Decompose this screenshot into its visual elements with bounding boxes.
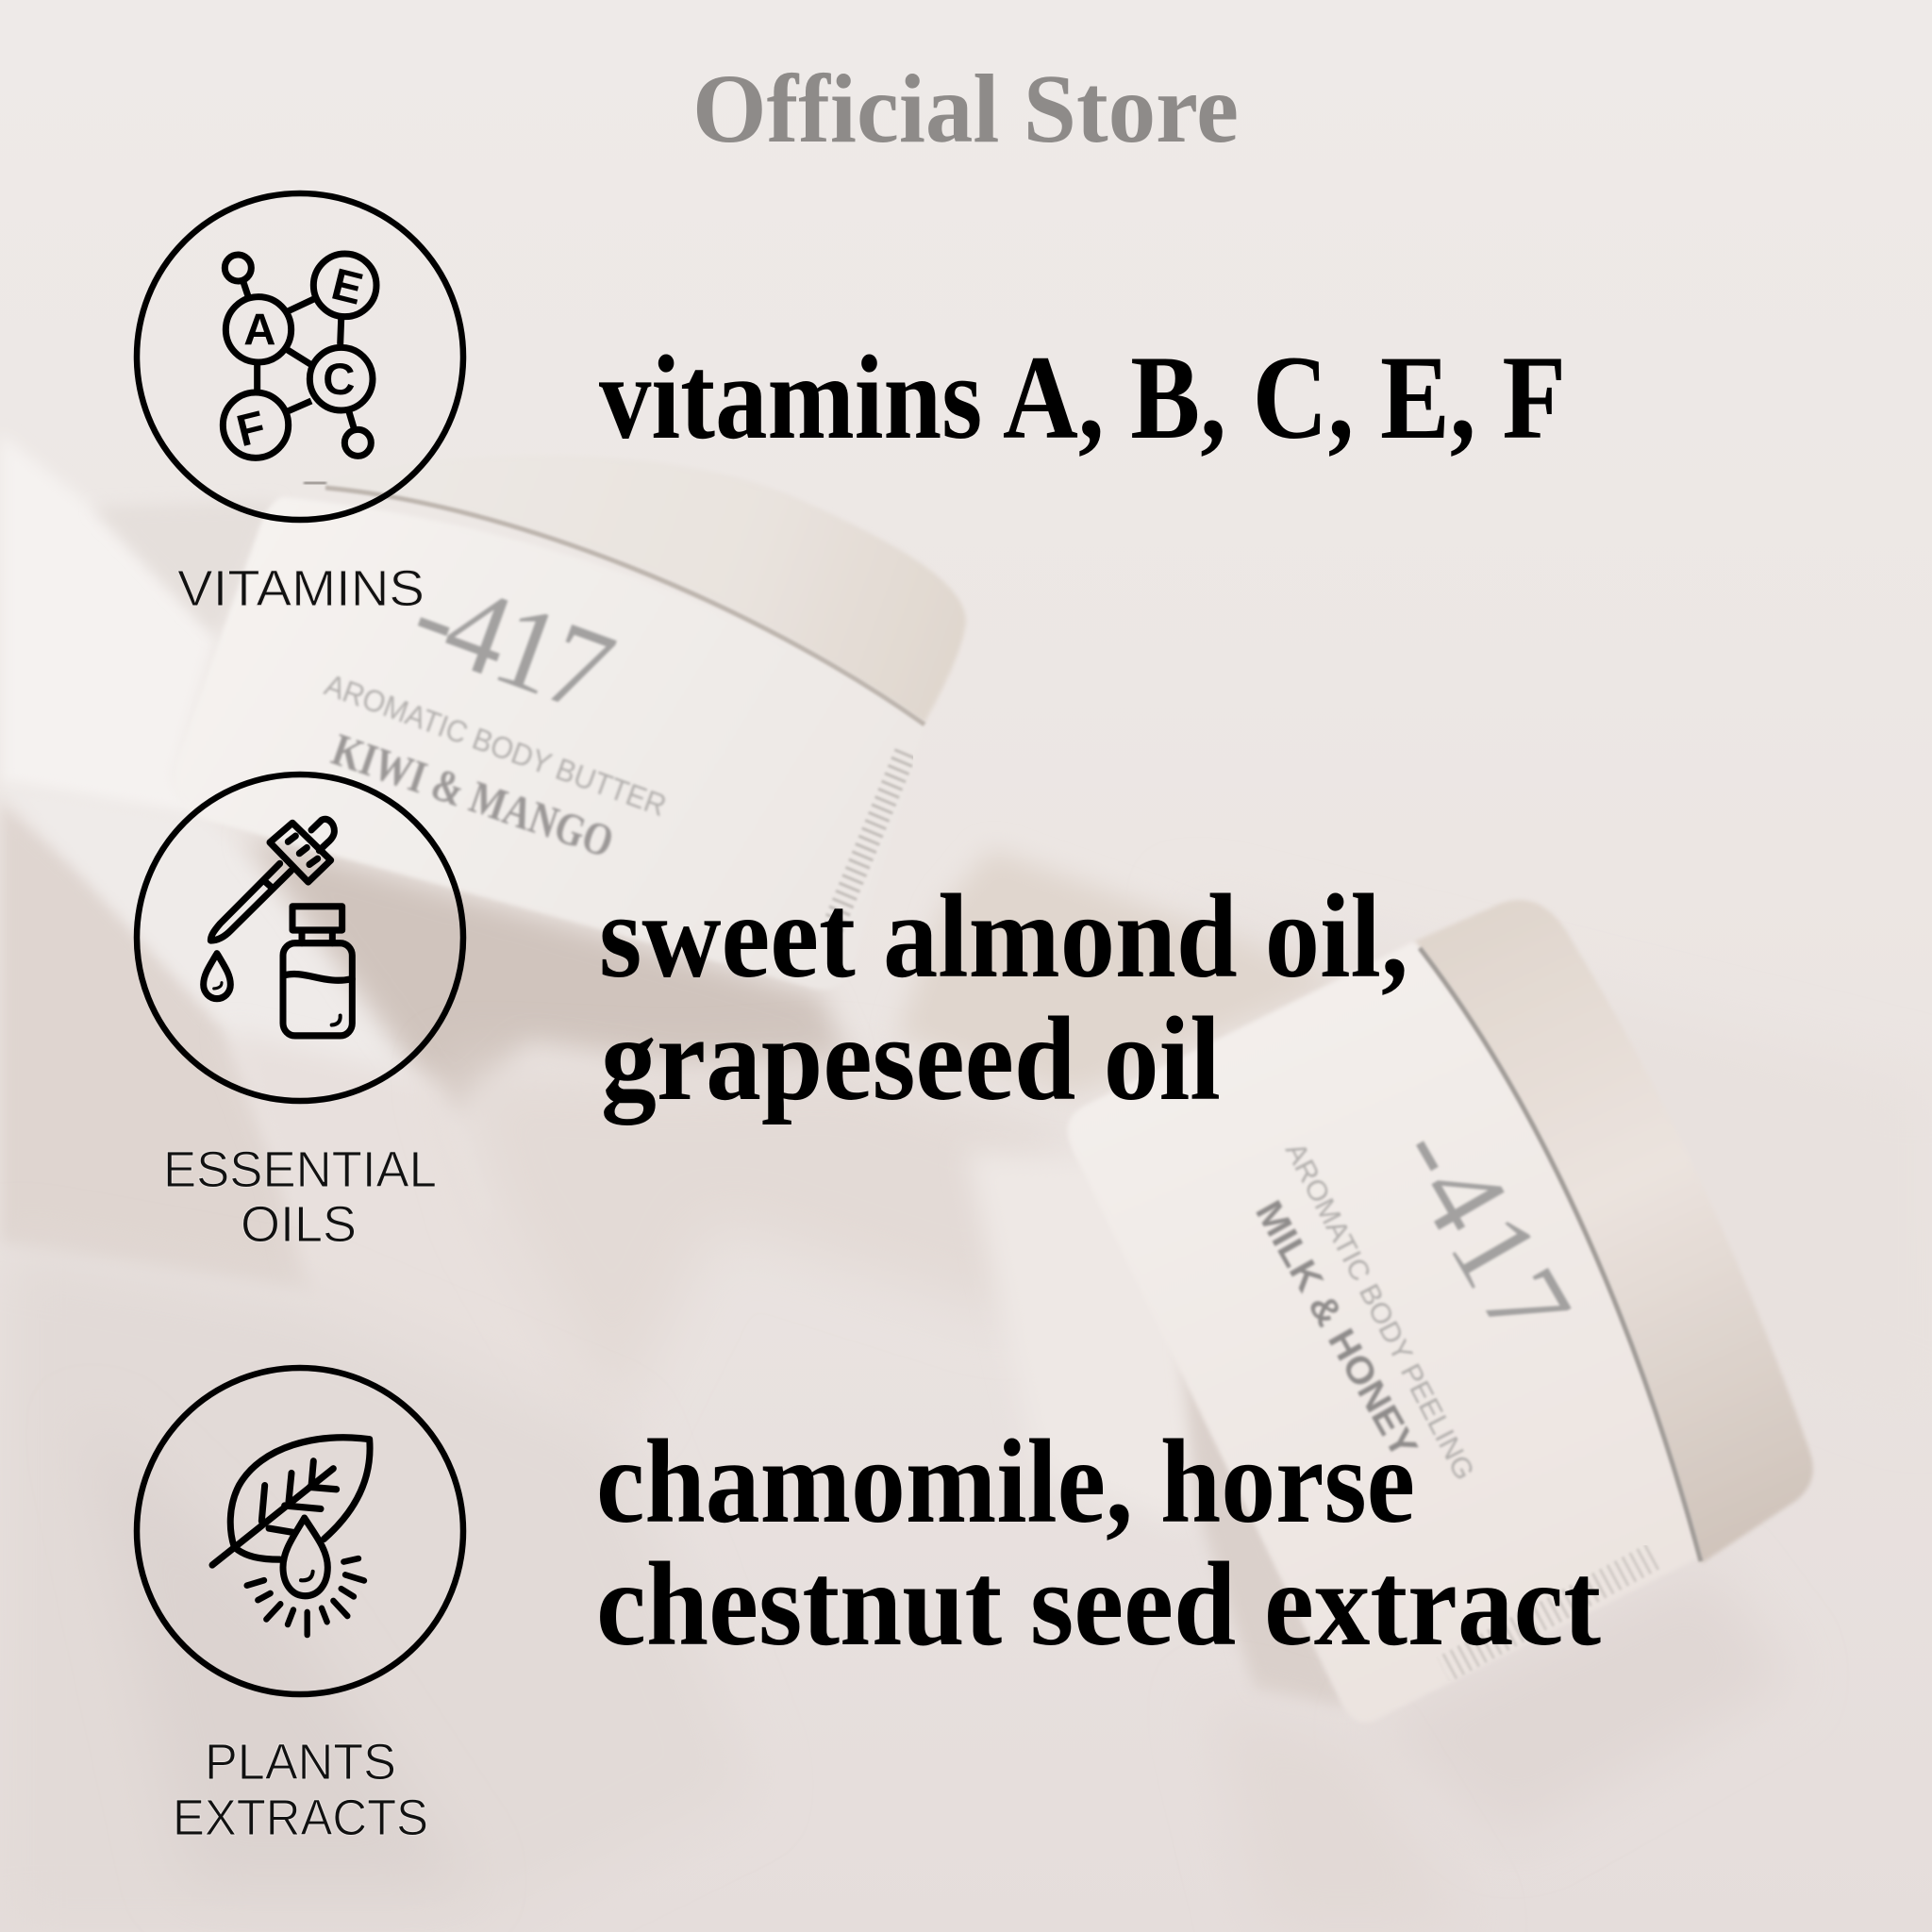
panel: plants extracts xyxy=(137,1368,463,1846)
jar 1 brand -417: -417 xyxy=(396,549,629,740)
icon: dropper and bottle xyxy=(137,774,463,1101)
jar 1 product type: AROMATIC BODY BUTTER xyxy=(321,668,671,823)
text: plants list: chestnut seed extract xyxy=(596,1539,1601,1671)
label: essential: ESSENTIAL xyxy=(163,1141,437,1198)
text: plants list xyxy=(596,1416,1601,1671)
jar 1 scent name: KIWI & MANGO xyxy=(325,723,620,868)
fabric folds xyxy=(0,433,1932,1932)
jar 1 hatch marks xyxy=(832,753,906,929)
icon: vitamins molecule: F xyxy=(232,402,271,457)
jar 2 product type: AROMATIC BODY PEELING xyxy=(1279,1138,1480,1485)
jar 2 scent name: MILK & HONEY xyxy=(1247,1194,1425,1465)
text: plants list: chamomile, horse xyxy=(596,1416,1415,1548)
text: oils list: sweet almond oil, xyxy=(599,871,1408,1003)
panel: vitamins xyxy=(137,193,463,617)
text: vitamins list: vitamins A, B, C, E, F xyxy=(599,332,1566,464)
label: plants: PLANTS xyxy=(205,1734,396,1790)
jar 2 hatch marks xyxy=(1443,1557,1653,1670)
icon: vitamins molecule: A xyxy=(243,305,275,355)
icon: vitamins molecule: C xyxy=(323,355,355,405)
panel: essential oils xyxy=(137,774,463,1253)
jar: Milk and Honey body peeling xyxy=(1068,900,1813,1723)
icon: leaf with drop xyxy=(137,1368,463,1694)
icon: vitamins molecule: E xyxy=(326,259,368,315)
label: extracts: EXTRACTS xyxy=(173,1790,428,1846)
label: vitamins: VITAMINS xyxy=(177,560,425,617)
icon: vitamins molecule xyxy=(137,193,463,520)
text: oils list xyxy=(599,871,1408,1125)
label: oils: OILS xyxy=(241,1196,357,1253)
text: oils list: grapeseed oil xyxy=(601,993,1221,1125)
jar: Kiwi and Mango body butter xyxy=(175,456,966,990)
title: Official Store xyxy=(692,55,1239,163)
jar 2 brand -417: -417 xyxy=(1373,1102,1596,1361)
